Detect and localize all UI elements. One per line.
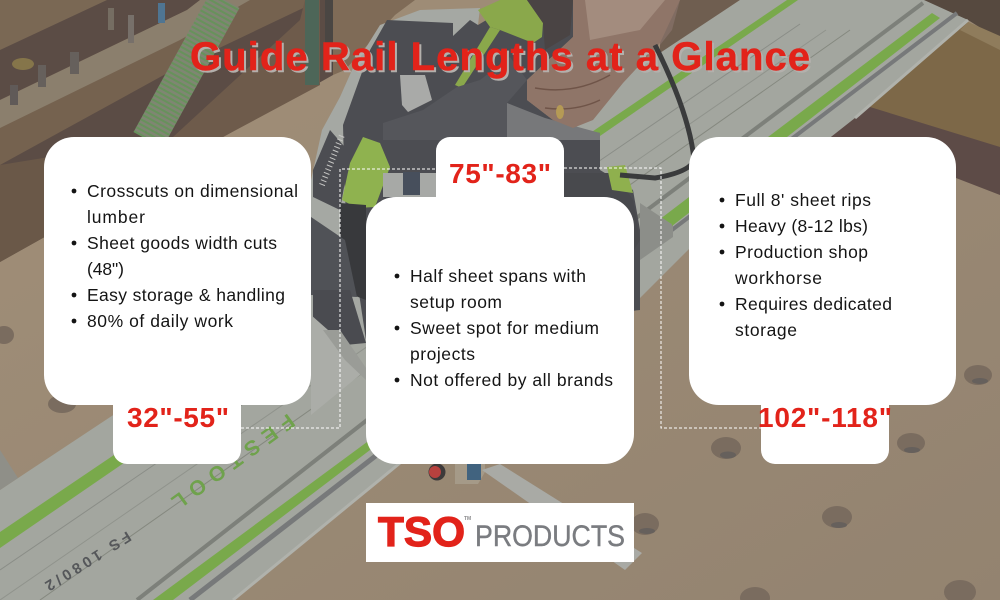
metal connector strip [482,464,642,570]
rail lettering FESTOOL: FESTOOL [167,409,299,513]
panel: short rails [44,137,311,464]
bullet list: long rails: workhorse [734,268,822,288]
bullet list: long rails: Full 8' sheet rips [735,190,871,210]
gray block at left edge [0,450,18,490]
length label: medium rails: 75"-83" [449,158,551,189]
length label: long rails: 102"-118" [758,402,892,433]
bullet list: long rails: storage [735,320,797,340]
rail lettering FS 1080/2: FS 1080/2 [42,528,134,594]
bullet list: short rails: Crosscuts on dimensional [87,181,298,201]
panel: medium rails [366,137,634,464]
bullet list: short rails: lumber [87,207,145,227]
tab: medium rails [436,137,564,221]
card: medium rails [366,197,634,464]
bullet list: short rails: 80% of daily work [87,311,233,331]
bullet list: short rails: (48") [87,259,124,279]
bench dog holes [0,326,992,600]
logo: TSO Products: TSO [378,508,465,555]
bullet list: short rails [72,181,298,331]
title: Guide Rail Lengths at a Glance [190,35,810,79]
track saw body [311,0,690,415]
bullet list: long rails: Requires dedicated [735,294,892,314]
bullet list: medium rails: Not offered by all brands [410,370,613,390]
bullet list: medium rails: Sweet spot for medium [410,318,599,338]
bullet list: long rails [720,190,892,340]
logo: TSO Products: TM [464,516,471,522]
logo: TSO Products [366,503,634,562]
bullet list: medium rails: Half sheet spans with [410,266,586,286]
power cable [620,45,694,178]
logo: TSO Products: PRODUCTS [475,520,625,553]
length label: short rails: 32"-55" [127,402,229,433]
bullet list: medium rails [395,266,613,390]
small knobs under saw [428,464,485,484]
ribbed green dust hose [148,0,225,140]
bullet list: short rails: Sheet goods width cuts [87,233,277,253]
bullet list: medium rails: setup room [410,292,502,312]
hand on saw handle [527,0,680,128]
bullet list: long rails: Production shop [735,242,868,262]
bullet list: long rails: Heavy (8-12 lbs) [735,216,868,236]
bullet list: short rails: Easy storage & handling [87,285,285,305]
panel: long rails [689,137,956,464]
dashed connector: short to medium [241,169,436,428]
card: short rails [44,137,311,405]
tab: short rails [113,380,241,464]
bullet list: medium rails: projects [410,344,475,364]
wood and dark band behind rail, top right [660,0,1000,195]
card: long rails [689,137,956,405]
tab: long rails [761,380,889,464]
dashed connector: medium to long [564,168,761,428]
workshop wood shelving, top left [0,0,415,262]
